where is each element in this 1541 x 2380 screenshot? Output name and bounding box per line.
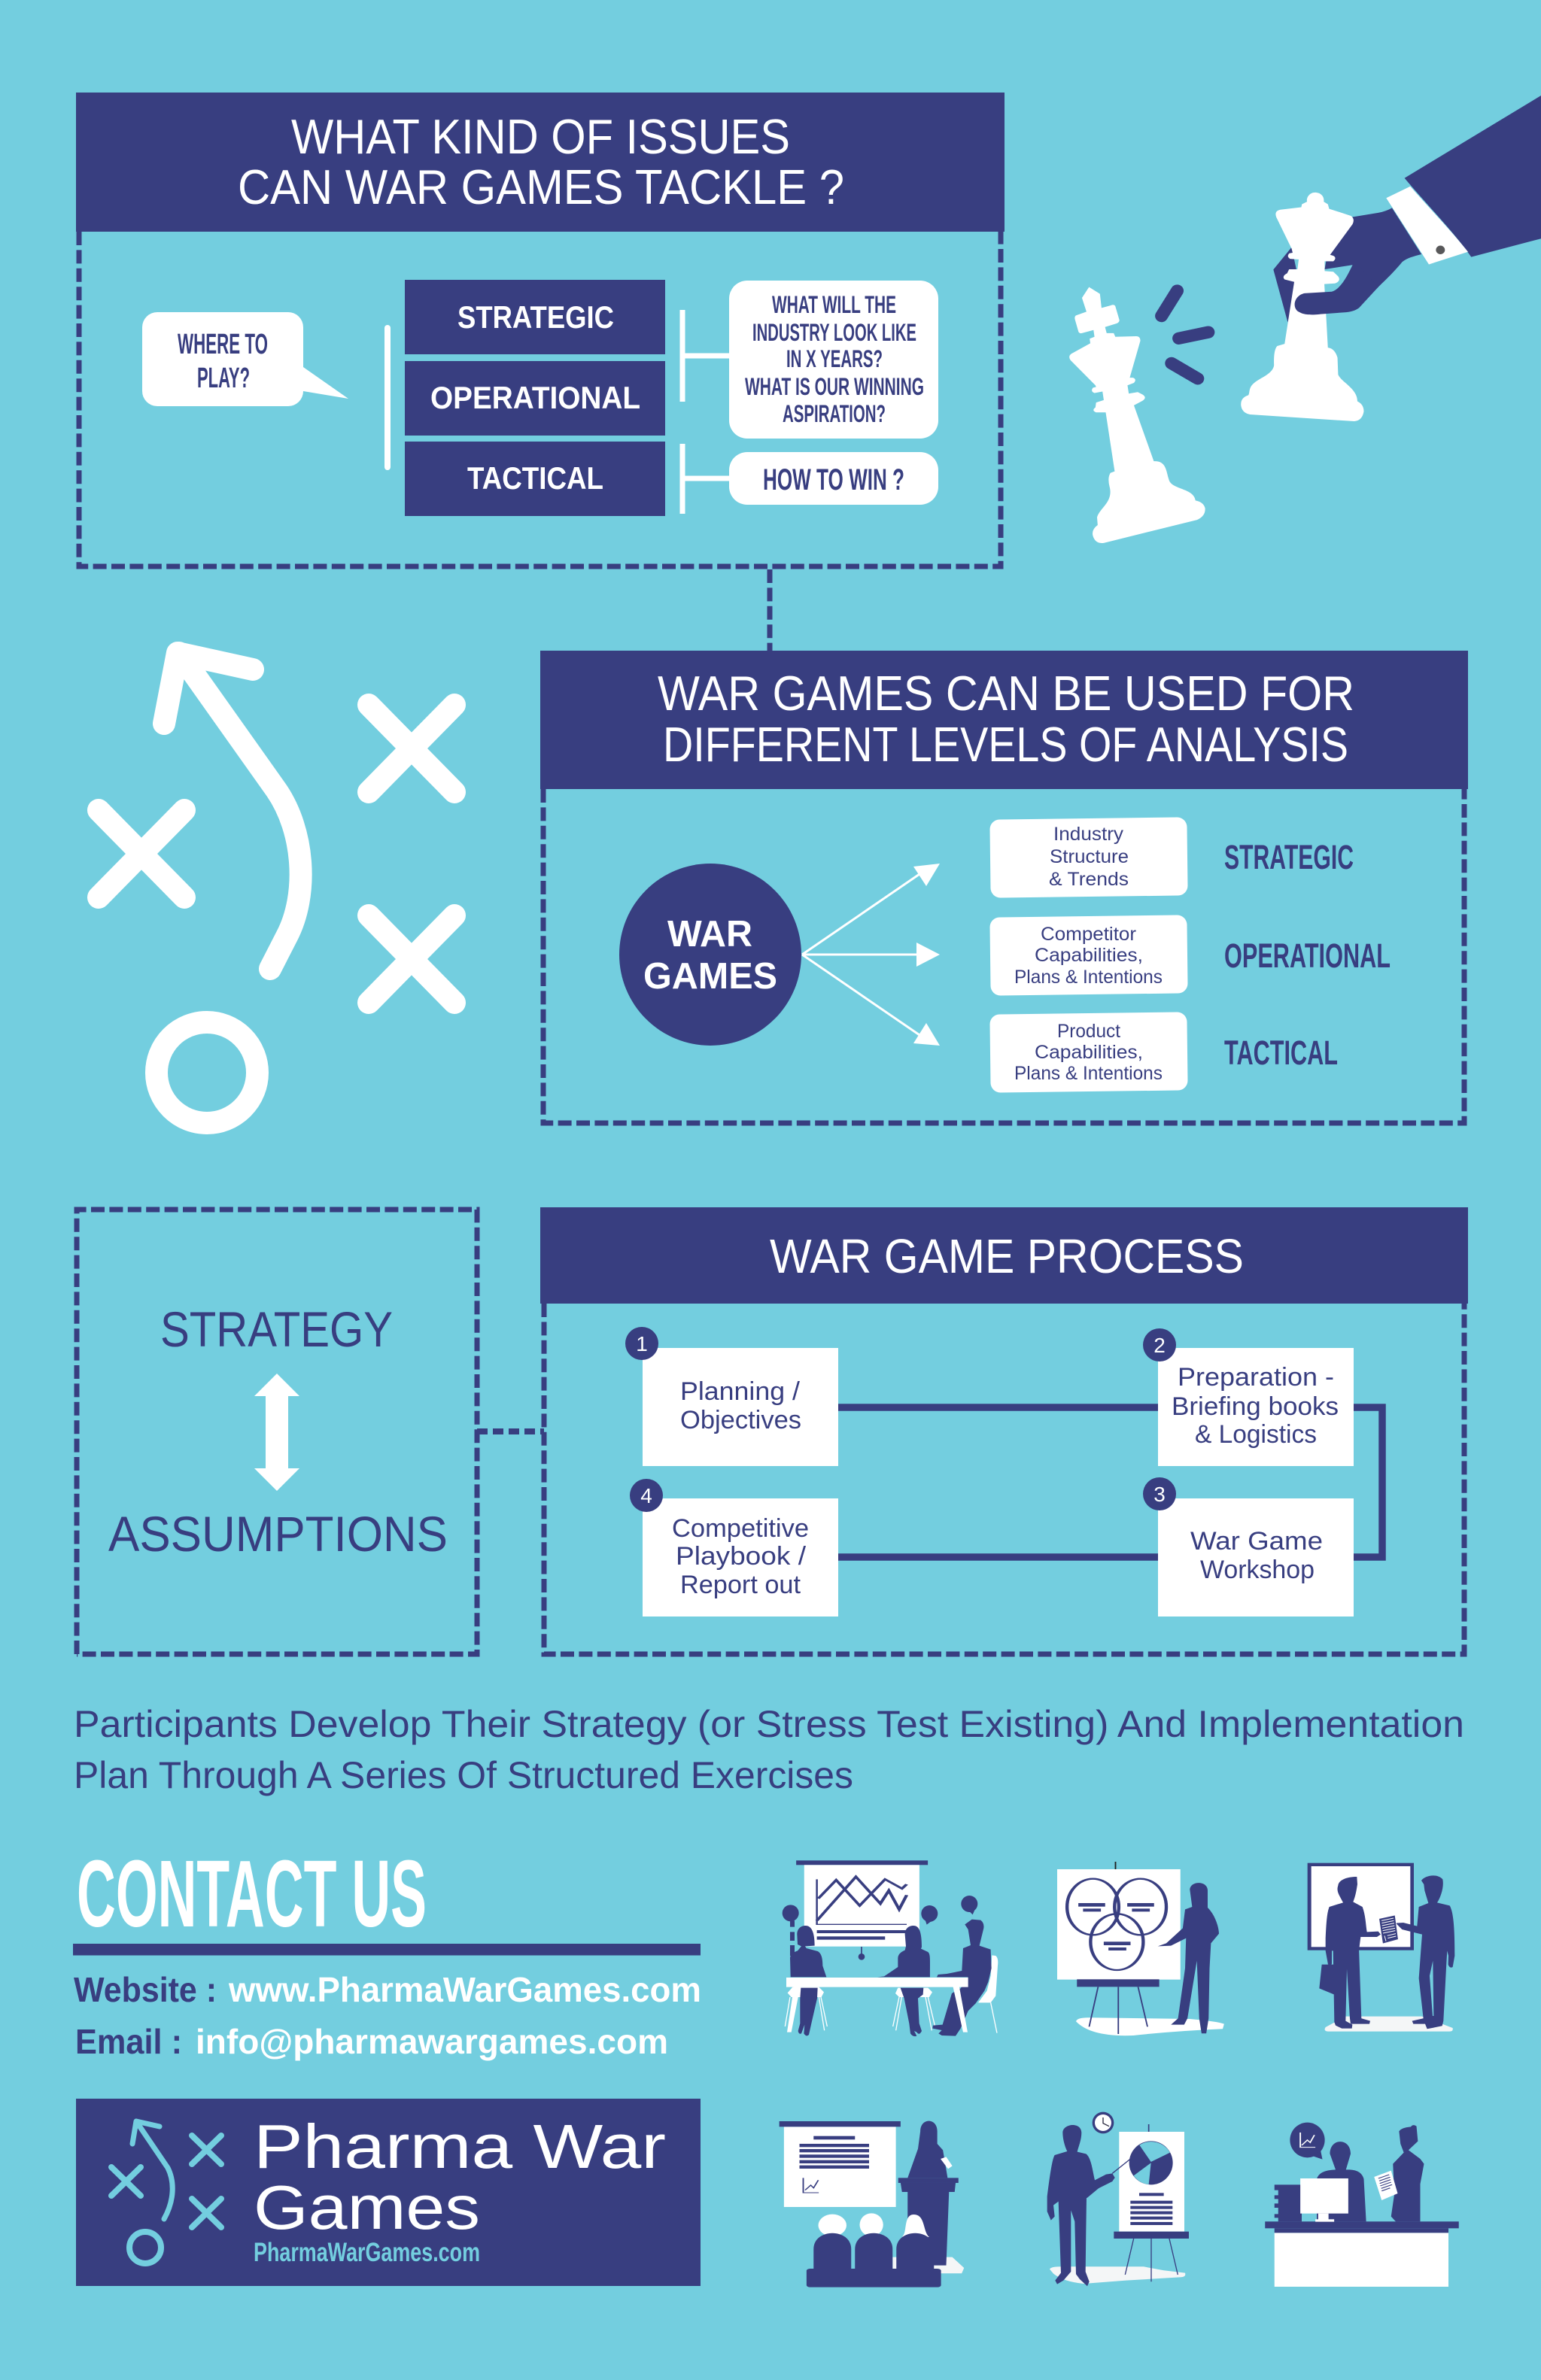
illustration: two people with document — [1308, 1863, 1454, 2032]
logo: pharma war games — [76, 2099, 701, 2286]
text: email: info@pharmawargames.com — [196, 2022, 668, 2061]
icon: logo playbook mark — [111, 2121, 221, 2263]
callout: winning aspiration questions: WHAT WILL THE — [772, 291, 896, 318]
card: industry structure — [989, 817, 1188, 898]
text block: participants statement — [74, 1703, 1464, 1796]
heading: different levels of analysis — [540, 651, 1468, 789]
speech bubble: where to play: WHERE TO — [178, 329, 268, 360]
step 2: preparation: Preparation - — [1178, 1363, 1334, 1392]
illustration: meeting around table — [783, 1860, 998, 2036]
icon: screen pendulum — [859, 1947, 863, 1954]
circle: war games: GAMES — [643, 956, 777, 997]
icon: curved play arrow — [164, 653, 301, 969]
step 1: planning: 1 — [636, 1332, 648, 1355]
icon: speaker microphone — [941, 2157, 953, 2169]
icon: floor shadow — [1325, 2017, 1453, 2032]
icon: projector screen with chart — [796, 1860, 928, 1947]
icon: speaker at podium — [898, 2121, 959, 2266]
icon: impact marks — [1162, 291, 1208, 378]
icon: shirt cuff — [1386, 187, 1468, 264]
level box: operational — [405, 361, 665, 436]
heading: contact us: CONTACT US — [77, 1841, 427, 1947]
icon: playbook arrow and marks — [99, 653, 454, 1123]
icon: presentation screen — [780, 2121, 901, 2207]
icon: x mark top right — [369, 705, 454, 792]
text: strategy: STRATEGY — [160, 1301, 393, 1357]
step 2: preparation: & Logistics — [1195, 1420, 1317, 1449]
illustration: venn diagram presenter — [1057, 1862, 1224, 2035]
text: website: Website : — [74, 1970, 217, 2009]
icon: floor shadow — [892, 2257, 964, 2273]
icon: speech bubbles — [783, 1896, 977, 1956]
speech bubble: where to play — [142, 312, 348, 406]
icon: man with bag — [1319, 1877, 1381, 2029]
speech bubble: where to play: PLAY? — [197, 363, 250, 394]
card: industry structure: & Trends — [1049, 869, 1129, 890]
card: product capabilities — [989, 1012, 1188, 1093]
circle: war games: WAR — [667, 914, 752, 955]
illustration: desk workers — [1265, 2123, 1459, 2287]
card: industry structure: Structure — [1050, 846, 1129, 867]
heading: what kind of issues: WHAT KIND OF ISSUES — [291, 109, 790, 164]
heading: what kind of issues — [76, 93, 1005, 232]
callout: how to win — [729, 452, 938, 505]
callout: winning aspiration questions: WHAT IS OUR WINNING — [745, 373, 924, 400]
step 4: playbook: Report out — [680, 1571, 801, 1599]
step 2: preparation — [1143, 1328, 1354, 1466]
connector: lower bracket — [682, 444, 730, 514]
card: product capabilities: Capabilities, — [1035, 1042, 1143, 1063]
label: operational: OPERATIONAL — [1224, 937, 1391, 975]
step 4: playbook — [630, 1479, 838, 1617]
level box: tactical: TACTICAL — [467, 460, 603, 496]
icon: board with pie chart — [1114, 2124, 1189, 2281]
connector: panel one to panel two — [767, 569, 772, 651]
icon: chess pieces and hand — [1069, 96, 1541, 543]
icon: framed board — [1308, 1863, 1414, 1950]
icon: audience — [807, 2213, 941, 2287]
icon: worker at computer — [1275, 2142, 1366, 2222]
callout: winning aspiration questions — [729, 281, 938, 439]
icon: seated people — [790, 1920, 992, 2036]
arrows: three levels — [802, 864, 940, 1046]
card: competitor capabilities — [989, 915, 1188, 996]
icon: floor shadow — [1050, 2266, 1185, 2284]
step 4: playbook: Playbook / — [676, 1542, 807, 1571]
level box: tactical — [405, 442, 665, 516]
panel: levels of analysis — [540, 651, 1468, 1123]
icon: speech bubble with chart — [1290, 2123, 1325, 2160]
circle: war games — [619, 864, 801, 1046]
icon: meeting people and table — [783, 1896, 998, 2036]
card: product capabilities: Plans & Intentions — [1014, 1063, 1163, 1084]
logo: pharma war games: PharmaWarGames.com — [254, 2238, 480, 2267]
step 3: workshop: 3 — [1153, 1483, 1166, 1506]
icon: presenting woman — [1158, 1883, 1219, 2033]
logo: pharma war games: Pharma War — [254, 2111, 666, 2181]
card: competitor capabilities: Capabilities, — [1035, 945, 1143, 966]
bracket: left white — [384, 325, 391, 470]
step 1: planning: Objectives — [680, 1406, 801, 1434]
connector: assumptions to process — [477, 1428, 544, 1434]
step 1: planning — [625, 1327, 838, 1466]
heading: different levels of analysis: DIFFERENT LEVELS OF ANALYSIS — [663, 717, 1348, 772]
icon: venn board — [1057, 1862, 1181, 2034]
icon: wall clock — [1093, 2112, 1114, 2133]
label: tactical: TACTICAL — [1224, 1034, 1338, 1072]
callout: winning aspiration questions: ASPIRATION? — [783, 400, 886, 427]
card: competitor capabilities: Competitor — [1041, 924, 1136, 945]
step 3: workshop — [1143, 1477, 1354, 1617]
step 4: playbook: Competitive — [672, 1514, 809, 1543]
icon: desk — [1265, 2221, 1459, 2287]
step 2: preparation: Briefing books — [1172, 1392, 1339, 1421]
icon: hand fingers behind — [1273, 208, 1421, 323]
step 3: workshop: War Game — [1190, 1527, 1323, 1556]
icon: hand thumb — [1295, 265, 1378, 314]
icon: man with pointer — [1047, 2125, 1130, 2286]
connector: process flow lines — [837, 1407, 1382, 1557]
logo: pharma war games: Games — [254, 2172, 480, 2242]
card: product capabilities: Product — [1057, 1021, 1120, 1042]
panel: strategy and assumptions — [77, 1210, 477, 1654]
step 1: planning: Planning / — [680, 1377, 801, 1406]
illustration: podium presentation — [780, 2121, 964, 2287]
level box: operational: OPERATIONAL — [430, 380, 640, 415]
label: strategic: STRATEGIC — [1224, 838, 1354, 876]
icon: shared document — [1379, 1915, 1398, 1944]
level box: strategic: STRATEGIC — [457, 299, 614, 335]
callout: winning aspiration questions: INDUSTRY LOOK LIKE — [752, 319, 916, 346]
illustration: pointer presenter — [1047, 2112, 1189, 2286]
heading: what kind of issues: CAN WAR GAMES TACKLE ? — [238, 159, 844, 214]
text: email: Email : — [75, 2022, 182, 2061]
card: industry structure: Industry — [1053, 824, 1124, 845]
step 2: preparation: 2 — [1153, 1334, 1166, 1357]
panel: issues war games tackle — [76, 93, 1005, 566]
icon: white queen — [1241, 193, 1363, 421]
icon: fallen white king — [1069, 287, 1205, 543]
icon: circle mark — [157, 1022, 257, 1123]
icon: x mark left — [99, 810, 184, 897]
text: website: www.PharmaWarGames.com — [228, 1970, 701, 2009]
icon: chairs — [785, 1955, 998, 2033]
icon: floor shadow — [1076, 2017, 1224, 2035]
step 3: workshop: Workshop — [1200, 1556, 1315, 1584]
text block: participants statement: Participants Develop Their Strategy (or Stress Test Existing) And Implementation — [74, 1703, 1464, 1745]
card: competitor capabilities: Plans & Intentions — [1014, 967, 1163, 988]
heading: war game process — [540, 1207, 1468, 1304]
text block: participants statement: Plan Through A Series Of Structured Exercises — [74, 1754, 853, 1796]
heading: war game process: WAR GAME PROCESS — [770, 1229, 1244, 1283]
connector: upper bracket — [682, 310, 730, 402]
callout: winning aspiration questions: IN X YEARS? — [786, 345, 883, 372]
level box: strategic — [405, 280, 665, 354]
icon: x mark bottom right — [369, 915, 454, 1003]
step 4: playbook: 4 — [640, 1484, 652, 1507]
icon: suit sleeve — [1405, 96, 1541, 257]
icon: man with document — [1396, 1875, 1454, 2029]
icon: woman with clipboard — [1374, 2125, 1424, 2221]
icon: table — [786, 1978, 968, 2032]
heading: different levels of analysis: WAR GAMES CAN BE USED FOR — [658, 666, 1354, 721]
text: assumptions: ASSUMPTIONS — [108, 1506, 448, 1562]
arrow: double headed — [254, 1374, 299, 1491]
panel: war game process — [540, 1207, 1468, 1654]
callout: how to win: HOW TO WIN ? — [763, 463, 904, 496]
